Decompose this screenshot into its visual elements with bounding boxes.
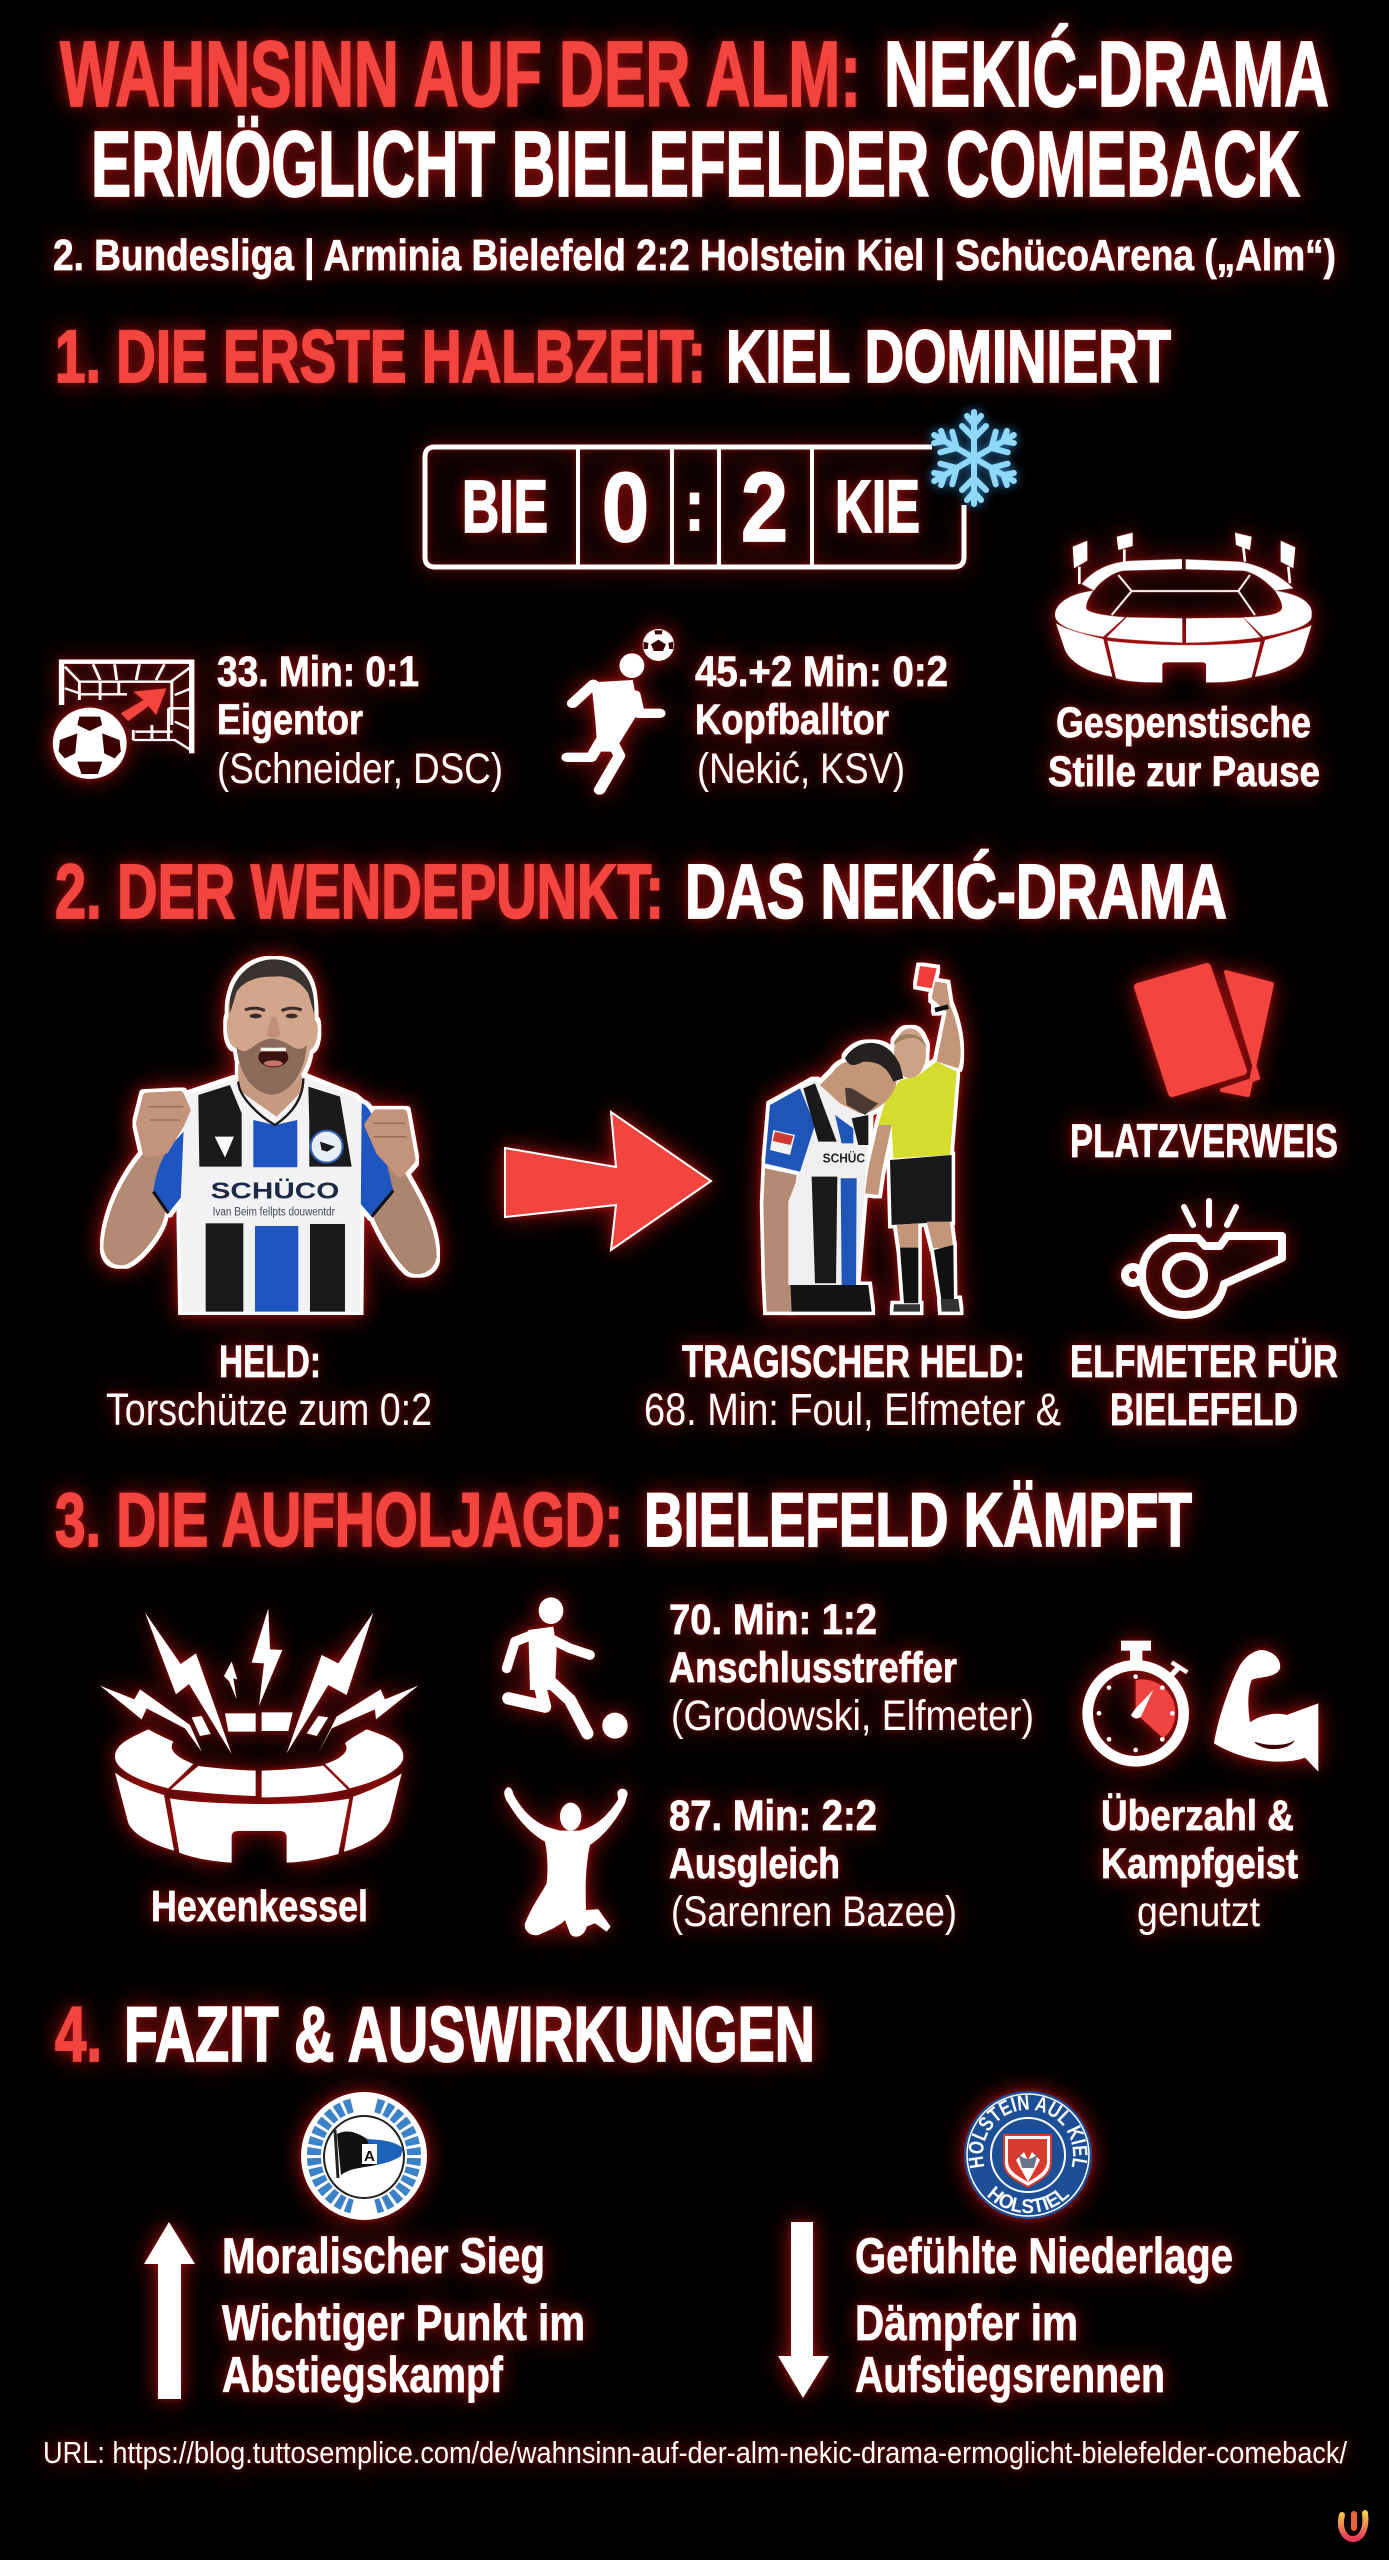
text: first goal back: Anschlusstreffer [669,1644,957,1692]
icon: own goal [53,662,193,779]
logo: Holstein Kiel: HOLSTIEL [987,2186,1070,2214]
caption: penalty [1070,1336,1338,1435]
scoreboard: 0 [602,452,649,562]
text: first goal back: 70. Min: 1:2 [669,1596,877,1644]
caption: hero: HELD: [219,1336,321,1387]
text: own goal [217,648,503,793]
photo: celebrating hero player: Ivan Beim fellpts douwentdr [213,1205,335,1219]
text: own goal: 33. Min: 0:1 [217,648,419,696]
text: witches cauldron: Hexenkessel [151,1882,368,1931]
icon: witches cauldron stadium [100,1608,418,1863]
text: header goal: 45.+2 Min: 0:2 [695,648,948,696]
text: Kiel takeaway: Aufstiegsrennen [855,2347,1165,2403]
text: Kiel takeaway: Dämpfer im [855,2295,1078,2351]
text: first goal back [669,1596,1034,1740]
caption: hero: Torschütze zum 0:2 [106,1384,432,1435]
text: ghost silence: Gespenstische [1056,699,1311,747]
text: man advantage: Überzahl & [1101,1792,1294,1840]
text: equaliser: (Sarenren Bazee) [671,1888,957,1936]
heading: section 4: 4. [55,1990,102,2078]
text: Bielefeld takeaway: Moralischer Sieg [222,2228,545,2284]
scoreboard: KIE [835,465,920,548]
scoreboard: BIE [462,465,548,548]
logo: Arminia Bielefeld: A [364,2148,375,2165]
photo: red card for the player [763,966,961,1312]
heading: section 4 [55,1990,815,2078]
caption: tragic hero: 68. Min: Foul, Elfmeter & [644,1384,1061,1435]
icon: flexed bicep [1214,1650,1318,1772]
text: man advantage [1101,1792,1298,1936]
icon: header goal [567,629,674,790]
photo: celebrating hero player [103,959,437,1312]
heading: section 3: 3. DIE AUFHOLJAGD: [55,1478,623,1563]
logo: Holstein Kiel: HOLSTEIN AUL KIEL [968,2095,1088,2168]
caption: tragic hero: TRAGISCHER HELD: [682,1336,1025,1387]
text: equaliser [669,1792,957,1936]
heading: section 1: KIEL DOMINIERT [726,315,1171,398]
text: ghost silence: Stille zur Pause [1048,748,1320,796]
icon: ghost stadium [1055,533,1312,683]
text: equaliser: 87. Min: 2:2 [669,1792,877,1840]
icon: kneeling celebration [504,1787,628,1937]
heading: section 1: 1. DIE ERSTE HALBZEIT: [55,315,706,398]
text: own goal: (Schneider, DSC) [217,745,503,793]
heading: section 3: BIELEFELD KÄMPFT [644,1478,1192,1563]
title [60,22,1329,216]
arrow: hero to tragic hero [505,1112,711,1250]
heading: section 2: 2. DER WENDEPUNKT: [55,849,664,935]
icon: penalty kicker [507,1597,628,1739]
logo: Arminia Bielefeld [301,2092,427,2220]
text: Bielefeld takeaway: Wichtiger Punkt im [222,2295,585,2351]
scoreboard [425,447,964,567]
text: Bielefeld takeaway: Abstiegskampf [222,2347,503,2403]
caption: penalty: BIELEFELD [1110,1384,1298,1435]
text: Bielefeld takeaway [222,2228,585,2403]
text: header goal [695,648,948,793]
arrow: up [144,2222,195,2399]
text: Kiel takeaway: Gefühlte Niederlage [855,2228,1233,2284]
icon: stopwatch [1088,1641,1187,1761]
photo: red card for the player: SCHÜC [823,1150,865,1165]
icon: publisher mark [1341,2513,1365,2539]
text: man advantage: genutzt [1137,1888,1260,1936]
text: ghost silence [1048,699,1320,796]
icon: snowflake [928,412,1020,504]
text: first goal back: (Grodowski, Elfmeter) [671,1692,1034,1740]
text: header goal: (Nekić, KSV) [697,745,905,793]
scoreboard: 2 [741,452,788,562]
heading: section 3 [55,1478,1192,1563]
text: Kiel takeaway [855,2228,1233,2403]
caption: hero [106,1336,432,1435]
photo: celebrating hero player: SCHÜCO [211,1177,339,1203]
text: man advantage: Kampfgeist [1101,1840,1298,1888]
icon: whistle [1125,1201,1282,1315]
scoreboard: : [685,466,704,546]
title: WAHNSINN AUF DER ALM: [60,22,861,126]
caption: tragic hero [644,1336,1061,1435]
icon: red cards [1138,967,1272,1095]
text: own goal: Eigentor [217,696,363,744]
heading: section 4: FAZIT & AUSWIRKUNGEN [124,1990,815,2078]
text: header goal: Kopfballtor [695,696,889,744]
text: equaliser: Ausgleich [669,1840,840,1888]
logo: Holstein Kiel [946,2074,1110,2237]
arrow: down [778,2222,829,2398]
